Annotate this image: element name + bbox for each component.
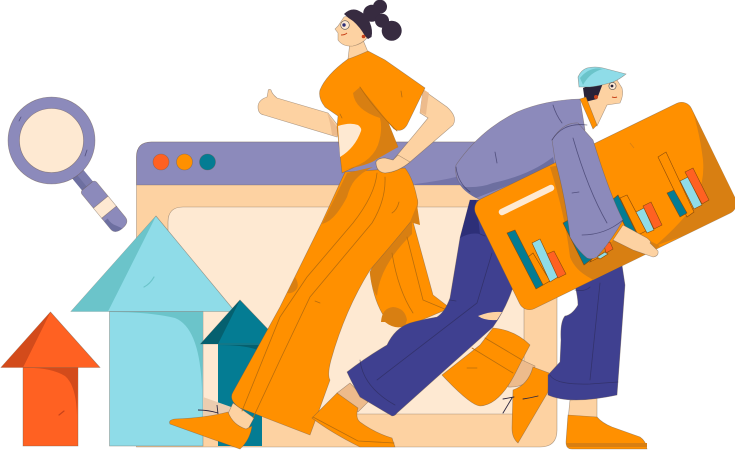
rear ankle (508, 360, 535, 387)
neck (348, 40, 368, 60)
rear calf (442, 328, 530, 406)
front ankle (226, 403, 254, 431)
hair (583, 83, 603, 102)
trousers (232, 168, 418, 435)
orange board with bar charts (471, 99, 735, 313)
hand on hip (376, 155, 410, 173)
shirt (320, 51, 425, 173)
neck and face (585, 80, 623, 126)
tear in trousers (478, 312, 502, 320)
man: torso (455, 99, 585, 200)
face (335, 14, 371, 46)
icon: magnifying glass (8, 97, 130, 234)
hair (344, 10, 372, 39)
chart 2 (563, 218, 613, 265)
front ankle (337, 383, 368, 412)
woman: upper body (258, 0, 455, 173)
rear arm (376, 90, 455, 173)
window control dots (153, 154, 216, 170)
man: arm and hand (552, 123, 658, 259)
label pill (502, 188, 551, 212)
man: rear trouser leg and shoe (548, 265, 647, 449)
flat cap (578, 67, 626, 87)
teal arrow (198, 300, 282, 446)
browser window panel (136, 142, 557, 447)
front trousers (347, 200, 530, 416)
collar (580, 97, 597, 129)
woman: front leg and shoe (170, 167, 420, 449)
shirt cut-out (338, 124, 361, 157)
front arm (258, 89, 340, 137)
chart 3 (612, 195, 662, 236)
front shoe (312, 393, 395, 447)
chart 4 (658, 152, 709, 217)
man: head and cap (578, 67, 626, 129)
red arrow (1, 312, 100, 446)
chart 1 (507, 230, 566, 289)
rear thigh (370, 218, 450, 326)
woman: rear leg and shoe (370, 218, 549, 443)
hair buns (363, 0, 402, 41)
rear shoe (512, 367, 549, 443)
hand (613, 225, 658, 257)
sleeve (552, 123, 623, 259)
front shoe (170, 412, 252, 449)
large light blue arrow (71, 216, 235, 446)
man: front trouser leg and shoe (312, 200, 530, 447)
